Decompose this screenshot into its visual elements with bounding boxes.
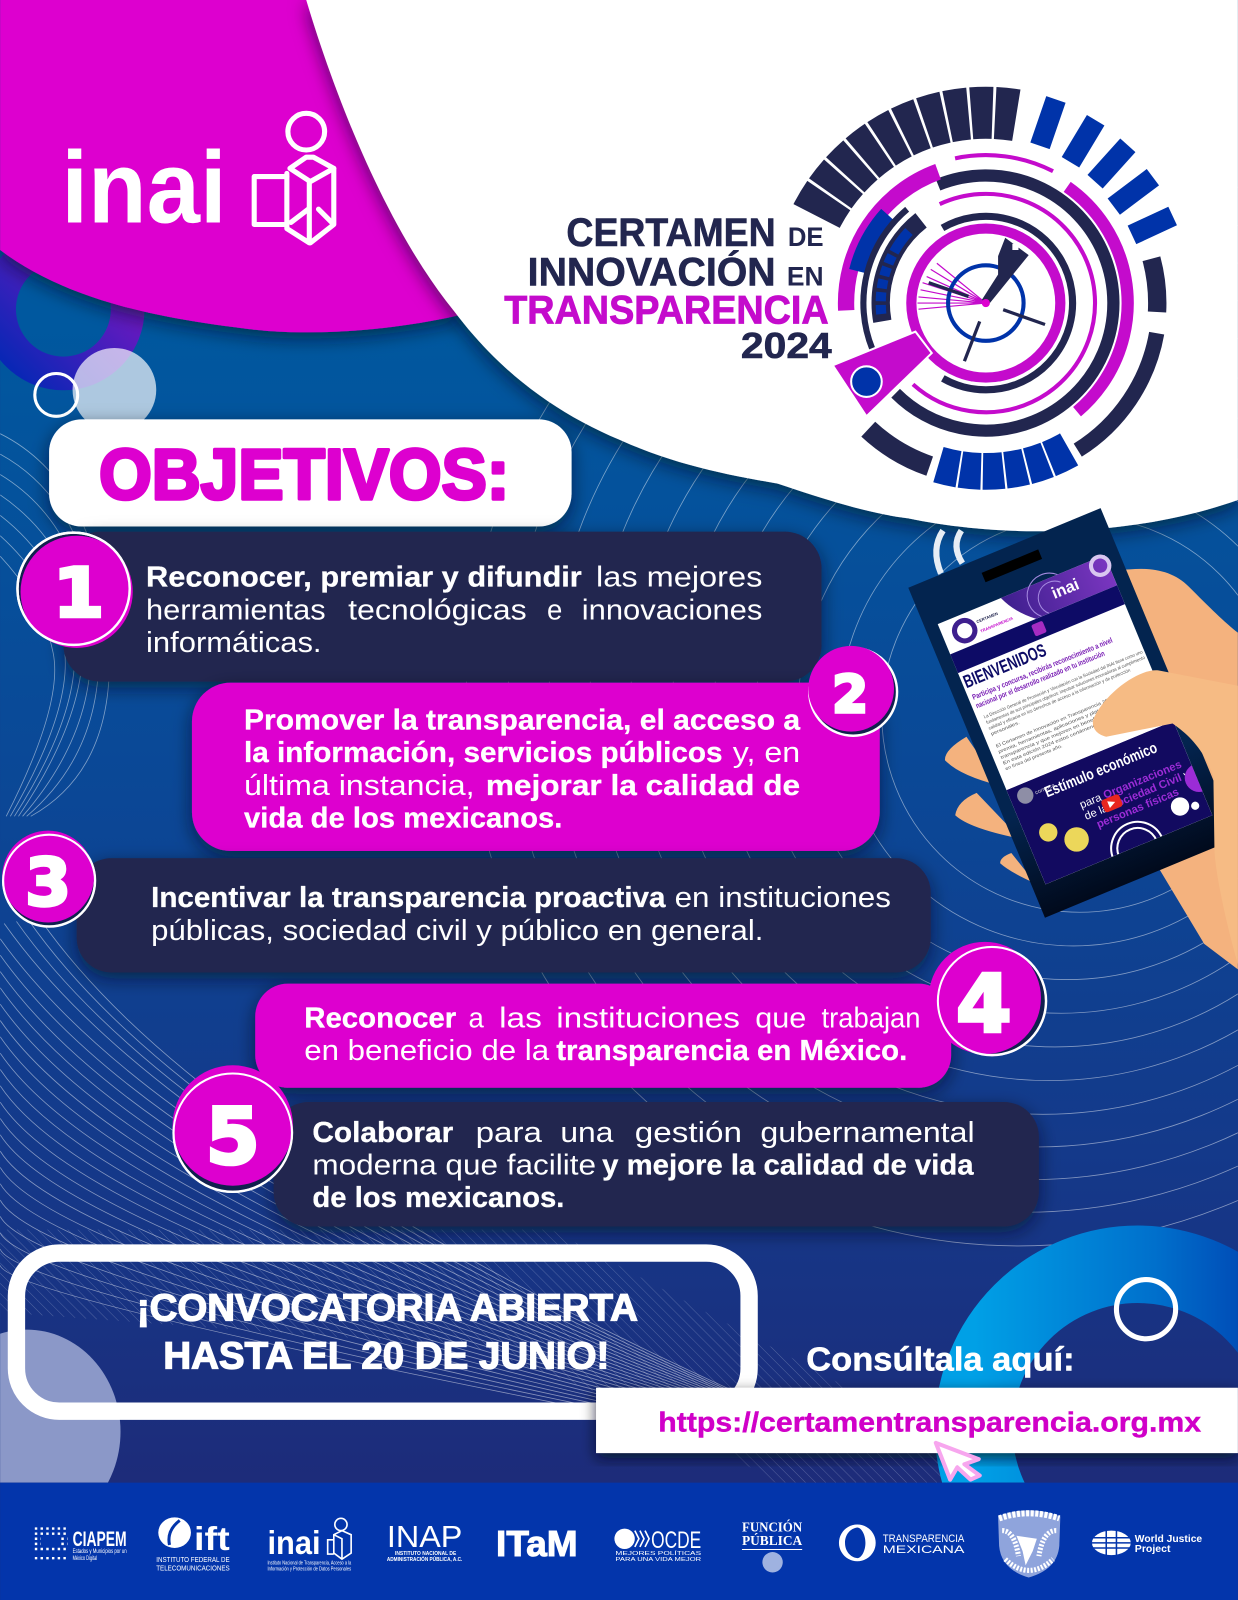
panel: objetivo 1: las mejores — [596, 562, 762, 594]
logo: Función Pública — [742, 1520, 803, 1572]
logo: inai: inai — [267, 1525, 321, 1562]
decorative pale circle bottom left — [0, 1330, 120, 1483]
magenta corner panel — [0, 0, 459, 332]
phone video: personas físicas — [1095, 786, 1181, 831]
phone screen: El Certamen de Innovación en Transparencia 2024 se llevará — [995, 685, 1139, 749]
objetivos heading — [49, 419, 572, 527]
logo: OCDE — [614, 1527, 702, 1563]
panel: objetivo 4: a — [468, 1003, 484, 1035]
logo: Función Pública: PÚBLICA — [742, 1533, 803, 1548]
logo: OCDE: PARA UNA VIDA MEJOR — [615, 1557, 702, 1563]
badge 2 — [808, 646, 897, 736]
badge 1 — [17, 533, 133, 648]
icon: signal arcs — [936, 531, 962, 573]
phone video: convoca — [1034, 782, 1057, 796]
phone — [908, 507, 1238, 918]
badge 3: 3 — [25, 845, 71, 921]
logo: inai — [267, 1518, 351, 1572]
phone speaker — [982, 549, 1042, 582]
logo: ITAM: ITaM — [496, 1524, 578, 1564]
logo: INAP: ADMINISTRACIÓN PÚBLICA, A.C. — [387, 1555, 463, 1563]
panel: objetivo 2: Promover la transparencia, el acceso a — [244, 705, 801, 737]
logo: INAP: INAP — [387, 1520, 462, 1554]
logo: Transparencia Mexicana: TRANSPARENCIA — [883, 1533, 965, 1545]
panel: objetivo 4: Reconocer — [304, 1003, 456, 1035]
callout: convocatoria abierta: ¡CONVOCATORIA ABIERTA — [137, 1286, 638, 1328]
phone screen: BIENVENIDOS — [960, 639, 1049, 692]
panel: objetivo 5: moderna que facilite — [312, 1149, 596, 1181]
phone screen: CERTAMEN — [976, 611, 999, 624]
title: Certamen de Innovación en Transparencia 2024: INNOVACIÓN — [528, 249, 776, 295]
panel: objetivo 2: vida de los mexicanos. — [244, 803, 562, 835]
phone video — [1006, 724, 1212, 884]
panel: objetivo 5: y mejore la calidad de vida — [602, 1149, 975, 1181]
panel: objetivo 1 — [63, 532, 822, 682]
logo: CIAPEM: Estados y Municipios por un — [73, 1548, 127, 1555]
footer band — [0, 1483, 1238, 1600]
phone screen: calidad y eficacia en los derechos de acceso a la información y de protección — [988, 667, 1131, 731]
panel: objetivo 5 — [274, 1102, 1039, 1227]
logo: Transparencia Mexicana: MEXICANA — [883, 1544, 966, 1556]
panel: objetivo 2: mejorar la calidad de — [486, 770, 800, 802]
panel: objetivo 4: trabajan — [822, 1003, 921, 1035]
hand front thumb — [1093, 670, 1238, 964]
phone screen: inai — [1049, 575, 1082, 603]
panel: objetivo 3: en instituciones — [675, 882, 891, 914]
badge 5: 5 — [206, 1092, 260, 1182]
phone screen: Participa y concursa, recibirás reconocimiento a nivel — [971, 636, 1114, 702]
inai logo: inai — [61, 130, 227, 244]
panel: objetivo 5: Colaborar — [312, 1117, 453, 1149]
title: Certamen de Innovación en Transparencia 2024: EN — [787, 262, 824, 292]
logo: IFT: TELECOMUNICACIONES — [156, 1564, 230, 1572]
panel: objetivo 5: para — [476, 1117, 542, 1149]
phone screen: La Dirección General de Promoción y Vinculación con la Sociedad del INAI tiene como uno — [983, 649, 1144, 719]
badge 2: 2 — [832, 666, 868, 725]
panel: objetivo 5: gestión — [635, 1117, 742, 1149]
panel: objetivo 3: Incentivar la transparencia proactiva — [151, 882, 667, 914]
url box — [596, 1388, 1238, 1453]
panel: objetivo 5: de los mexicanos. — [312, 1182, 564, 1214]
panel: objetivo 4: instituciones — [556, 1003, 740, 1035]
title: Certamen de Innovación en Transparencia 2024: CERTAMEN — [566, 211, 776, 255]
logo: INAP: INSTITUTO NACIONAL DE — [395, 1551, 456, 1557]
decorative circles top left — [0, 245, 156, 432]
panel: objetivo 1: informáticas. — [146, 627, 322, 659]
title: Certamen de Innovación en Transparencia 2024 — [504, 211, 832, 366]
title: Certamen de Innovación en Transparencia 2024: TRANSPARENCIA — [504, 288, 829, 332]
logo: inai: Información y Protección de Datos Personales — [267, 1566, 351, 1572]
logo: CIAPEM — [35, 1527, 127, 1562]
logo: IFT — [156, 1517, 230, 1572]
logo: World Justice Project: World Justice — [1135, 1534, 1203, 1545]
panel: objetivo 2 — [192, 683, 880, 851]
panel: objetivo 5: una — [560, 1117, 614, 1149]
title: Certamen de Innovación en Transparencia 2024: 2024 — [741, 326, 832, 366]
logo: CIAPEM: CIAPEM — [73, 1527, 127, 1551]
logo: IFT: INSTITUTO FEDERAL DE — [156, 1556, 230, 1564]
panel: objetivo 5: gubernamental — [760, 1117, 975, 1149]
objetivos heading: OBJETIVOS: — [99, 435, 509, 515]
callout: convocatoria abierta: HASTA EL 20 DE JUNIO! — [163, 1334, 609, 1376]
panel: objetivo 1: innovaciones — [582, 594, 762, 626]
panel: objetivo 4: en beneficio de la — [304, 1035, 549, 1067]
title: Certamen de Innovación en Transparencia 2024: DE — [788, 222, 824, 252]
badge 3 — [2, 831, 95, 927]
decorative blue ring bottom right — [936, 1226, 1238, 1483]
logo: Transparencia Mexicana — [839, 1524, 966, 1561]
panel: objetivo 1: herramientas — [146, 594, 326, 626]
panel: objetivo 2: la información, servicios públicos — [244, 737, 723, 769]
logo: OCDE: OCDE — [651, 1527, 701, 1554]
callout: convocatoria abierta — [16, 1253, 749, 1411]
panel: objetivo 3: públicas, sociedad civil y público en general. — [151, 915, 763, 947]
hand back — [945, 569, 1238, 969]
panel: objetivo 2: última instancia, — [244, 770, 475, 802]
panel: objetivo 1: e — [547, 594, 562, 626]
certamen radial logo — [728, 46, 1238, 560]
logo: OCDE: MEJORES POLÍTICAS — [615, 1550, 702, 1557]
phone video: Estímulo económico — [1042, 739, 1160, 801]
white header panel — [306, 0, 1238, 531]
badge 5 — [173, 1065, 293, 1192]
logo: World Justice Project: Project — [1135, 1544, 1171, 1555]
logo: IFT: ift — [194, 1521, 230, 1558]
consultala label: Consúltala aquí: — [806, 1341, 1075, 1378]
phone screen: en línea del presente año. — [1004, 743, 1063, 771]
icon: inai book figure — [254, 113, 334, 243]
phone screen — [938, 554, 1212, 884]
decorative white ring — [1116, 1280, 1176, 1339]
inai logo — [61, 113, 334, 244]
logo: World Justice Project — [1092, 1531, 1203, 1555]
phone video: para Organizaciones — [1078, 759, 1183, 811]
logo: CIAPEM: México Digital — [73, 1555, 97, 1562]
badge 4 — [929, 942, 1046, 1055]
phone screen: En esta edición 2024 estos certámenes están participando — [1002, 702, 1146, 766]
panel: objetivo 4: las — [499, 1003, 542, 1035]
phone screen: transparencia y que mejoren en beneficio de la población — [1000, 697, 1144, 760]
phone video: de la Sociedad Civil y — [1083, 768, 1192, 823]
panel: objetivo 1: tecnológicas — [348, 594, 527, 626]
panel: objetivo 3 — [77, 858, 931, 972]
phone screen: personales. — [990, 720, 1020, 736]
panel: objetivo 4 — [255, 984, 951, 1088]
phone screen: TRANSPARENCIA — [980, 616, 1014, 634]
logo: UNAM crest — [998, 1510, 1060, 1578]
logo: inai: Instituto Nacional de Transparencia, Acceso a la — [267, 1560, 351, 1566]
logo: Función Pública: FUNCIÓN — [742, 1520, 803, 1535]
phone screen: premia, herramientas, aplicaciones y plataformas en favor — [997, 691, 1141, 754]
badge 4: 4 — [956, 958, 1011, 1051]
phone screen: fundamentos de sus principales objetivos: impulsar soluciones innovadoras al cumplimiento — [985, 655, 1146, 725]
phone screen: nacional por el desarrollo realizado en tu institución — [974, 649, 1106, 710]
icon: cursor — [936, 1443, 980, 1480]
panel: objetivo 2: y, en — [733, 737, 800, 769]
panel: objetivo 1: Reconocer, premiar y difundir — [146, 562, 582, 594]
badge 1: 1 — [53, 553, 104, 632]
panel: objetivo 4: transparencia en México. — [556, 1035, 907, 1067]
panel: objetivo 4: que — [755, 1003, 806, 1035]
url box: https://certamentransparencia.org.mx — [658, 1407, 1202, 1438]
